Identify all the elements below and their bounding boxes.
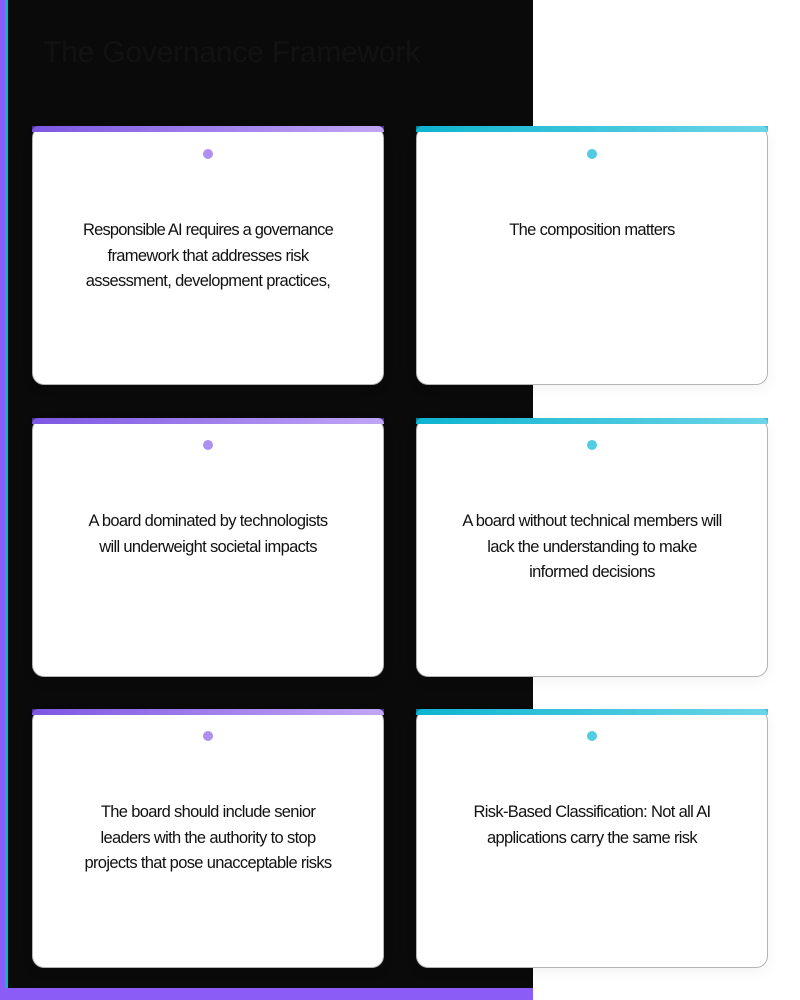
card: senior leaders [32, 709, 384, 968]
dark background panel [0, 0, 533, 1000]
card: composition [416, 126, 768, 386]
card: technical members: A board without technical members will [462, 512, 722, 530]
card: senior leaders: leaders with the authority to stop [100, 829, 316, 847]
card: technologists: will underweight societal impacts [99, 538, 317, 556]
card: technical members: informed decisions [529, 563, 655, 581]
card: senior leaders: projects that pose unacceptable risks [84, 854, 332, 872]
left cyan stripe [5, 0, 8, 988]
card: technical members: lack the understanding to make [487, 538, 697, 556]
card: governance framework: assessment, development practices, [86, 272, 330, 290]
card: risk classification [416, 709, 768, 968]
card: technologists: A board dominated by technologists [88, 512, 327, 530]
card: risk classification: Risk-Based Classification: Not all AI [474, 803, 710, 821]
card: risk classification: applications carry the same risk [487, 829, 697, 847]
card: technical members [416, 418, 768, 678]
card: governance framework [32, 126, 384, 385]
card: composition: The composition matters [509, 221, 675, 239]
card: governance framework: Responsible AI requires a governance [83, 221, 333, 239]
bottom purple stripe [0, 988, 533, 1000]
title: The Governance Framework [43, 36, 420, 69]
card: senior leaders: The board should include senior [101, 803, 315, 821]
card: technologists [32, 418, 384, 677]
card: governance framework: framework that addresses risk [108, 247, 308, 265]
left purple stripe [0, 0, 5, 1000]
